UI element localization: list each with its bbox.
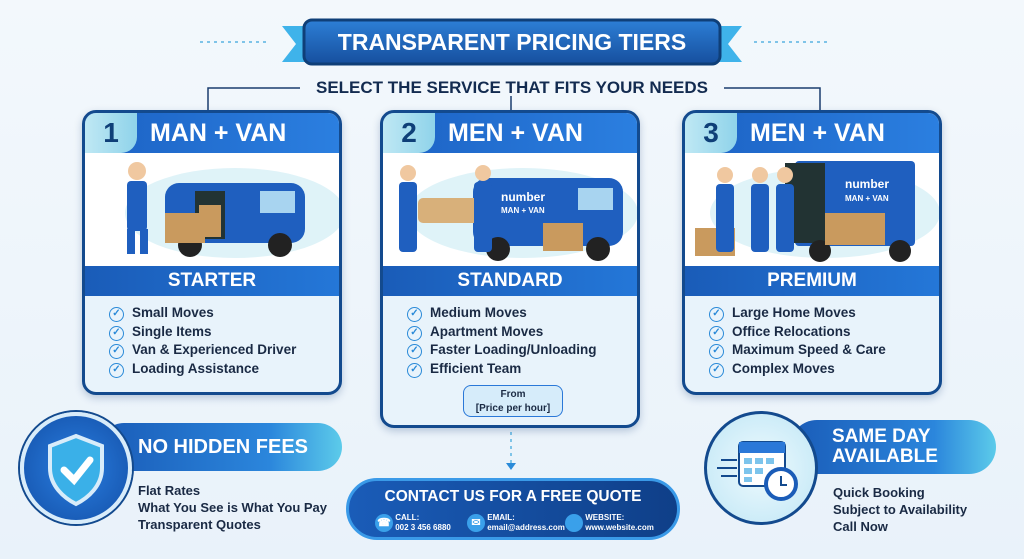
contact pill: CONTACT US FOR A FREE QUOTE [385,488,641,505]
icon: shield [20,412,132,524]
panel 3 [682,110,942,395]
panel 3: 3 [703,117,719,148]
price box: From [500,389,526,400]
panel 2: Faster Loading/Unloading [430,342,597,357]
contact pill: ✉ [471,517,481,529]
contact pill: ☎ [377,517,391,529]
contact pill: WEBSITE: [585,513,624,522]
panel 3: PREMIUM [767,270,857,291]
same day pill: SAME DAY [832,426,931,447]
illustration: truck with team [685,153,939,266]
panel 1: Single Items [132,324,212,338]
same day text: Quick Booking [833,485,925,500]
fees text: What You See is What You Pay [138,500,327,515]
panel 1: MAN + VAN [150,119,286,147]
panel 1: Loading Assistance [132,360,259,376]
panel 2: STANDARD [457,270,563,291]
panel 2: Medium Moves [430,305,527,320]
subtitle: SELECT THE SERVICE THAT FITS YOUR NEEDS [316,78,708,97]
panel 1: Van & Experienced Driver [132,342,296,357]
same day pill [790,420,996,474]
contact pill [346,478,680,540]
panel 2: Apartment Moves [430,324,543,338]
no hidden fees pill: NO HIDDEN FEES [138,436,308,458]
title banner: TRANSPARENT PRICING TIERS [338,29,686,55]
contact pill: email@address.com [487,523,565,532]
icon: calendar [704,411,818,525]
panel 3: Large Home Moves [732,305,856,320]
contact pill: 002 3 456 6880 [395,523,451,532]
panel 3: Maximum Speed & Care [732,342,886,357]
title banner [282,18,742,66]
panel 1: Small Moves [132,305,214,320]
panel 2 [380,110,640,428]
panel 1: 1 [103,117,119,148]
panel 3: MEN + VAN [750,119,885,147]
price box [463,385,563,417]
panel 3: Complex Moves [732,360,835,376]
illustration: two men with van [383,153,637,266]
fees text: Transparent Quotes [138,517,261,532]
same day pill: AVAILABLE [832,446,938,467]
illustration: two men with van: number [501,190,545,204]
contact pill: EMAIL: [487,513,515,522]
same day text: Subject to Availability [833,502,967,517]
illustration: two men with van: MAN + VAN [501,206,545,215]
no hidden fees pill [100,423,342,471]
same day text: Call Now [833,519,888,534]
illustration: man with van [85,153,339,266]
panel 1: STARTER [168,270,256,291]
illustration: truck with team: MAN + VAN [845,194,889,203]
panel 2: 2 [401,117,417,148]
panel 2: Efficient Team [430,360,521,376]
same day text [833,485,967,534]
panel 1 [82,110,342,395]
contact pill: www.website.com [585,523,654,532]
panel 3: Office Relocations [732,324,851,338]
price box: [Price per hour] [476,403,550,414]
illustration: truck with team: number [845,177,889,191]
fees text [138,483,327,532]
fees text: Flat Rates [138,483,200,498]
panel 2: MEN + VAN [448,119,583,147]
contact pill: CALL: [395,513,419,522]
